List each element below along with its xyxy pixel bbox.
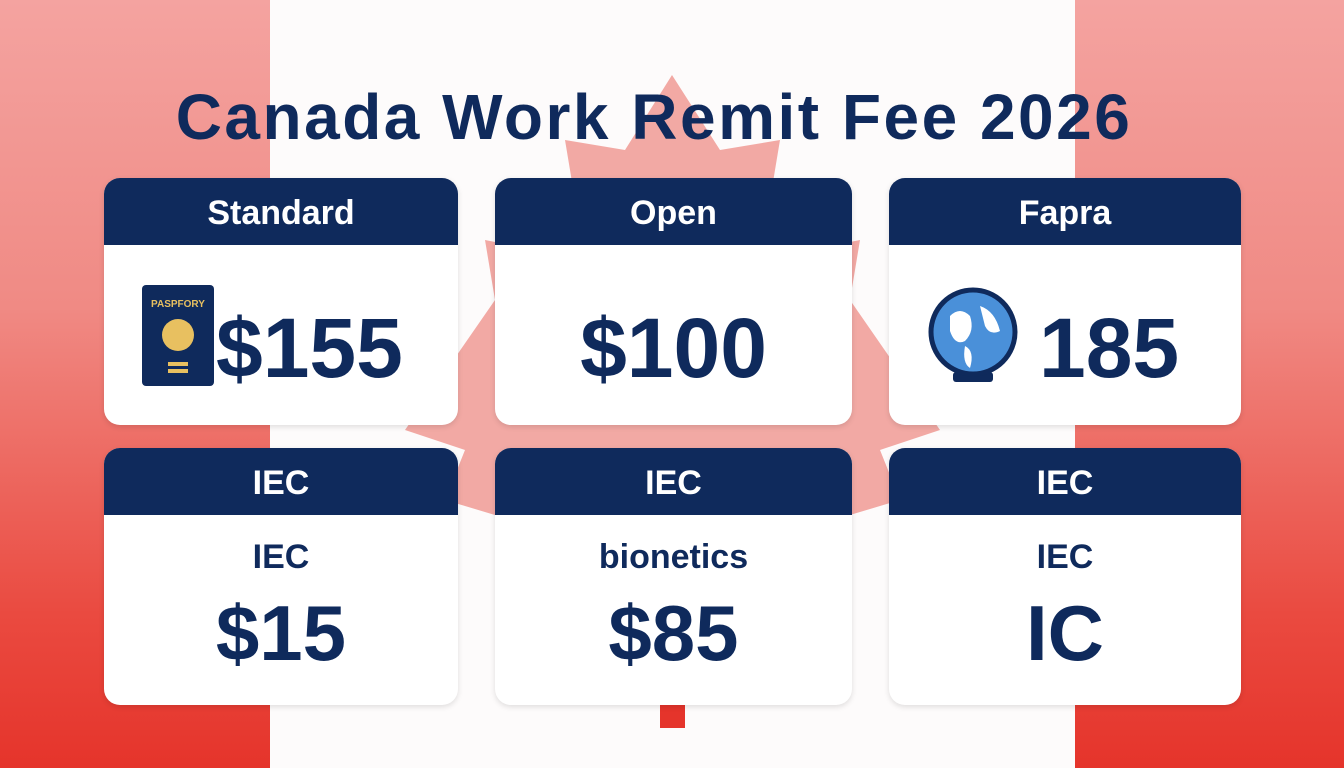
card: IEC 2: $85 xyxy=(608,589,739,677)
card: Open xyxy=(495,178,852,425)
icon: passport xyxy=(142,285,214,386)
card: IEC 1 xyxy=(104,448,458,705)
card: Open: Open xyxy=(630,194,717,232)
card: IEC 1: IEC xyxy=(253,538,309,576)
card: Fapra: 185 xyxy=(1039,301,1179,395)
card: Fapra: Fapra xyxy=(1019,194,1111,232)
card: IEC 3: IEC xyxy=(1037,538,1093,576)
card: IEC 1: $15 xyxy=(216,589,346,677)
card: Standard: $155 xyxy=(216,301,403,395)
card: Open: $100 xyxy=(580,301,767,395)
card: IEC 2: IEC xyxy=(645,464,702,502)
card: Standard xyxy=(104,178,458,425)
card: Standard: Standard xyxy=(207,194,355,232)
card: IEC 1: IEC xyxy=(253,464,309,502)
card: IEC 3 xyxy=(889,448,1241,705)
icon: passport: PASPFORY xyxy=(151,299,205,310)
card: Fapra xyxy=(889,178,1241,425)
card: IEC 3: IEC xyxy=(1037,464,1093,502)
card: IEC 2 xyxy=(495,448,852,705)
title: Canada Work Remit Fee 2026 xyxy=(176,81,1132,153)
icon: globe xyxy=(928,288,1018,382)
card: IEC 2: bionetics xyxy=(599,538,748,576)
card: IEC 3: IC xyxy=(1026,589,1104,677)
